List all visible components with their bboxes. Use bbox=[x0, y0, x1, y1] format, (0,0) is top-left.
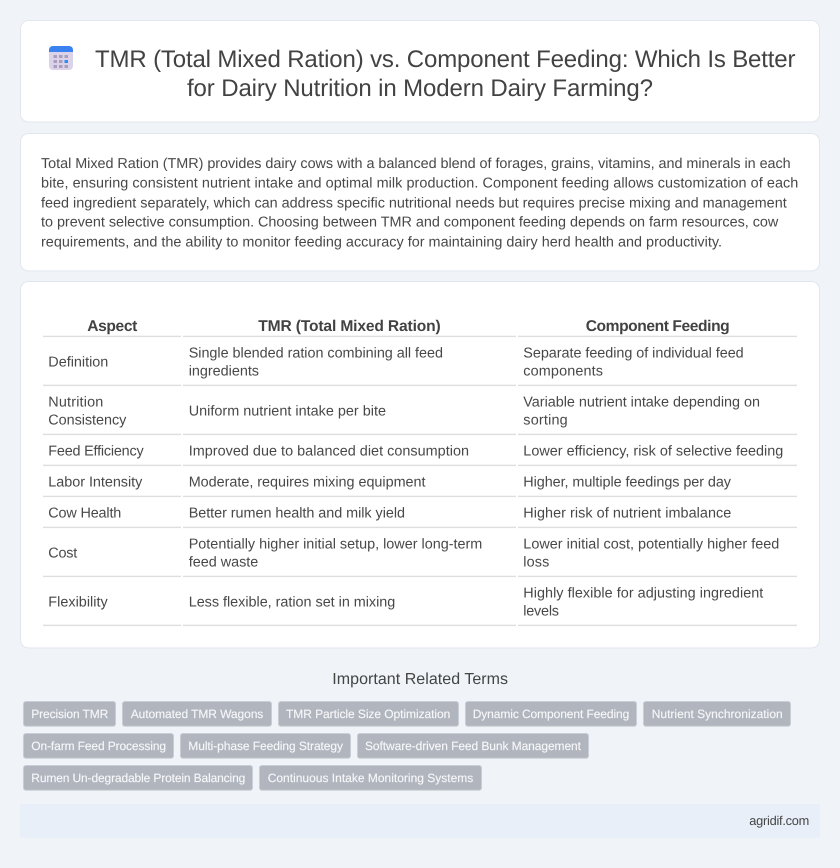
row: cost: Cost bbox=[48, 545, 77, 561]
row: definition: components bbox=[523, 364, 603, 380]
related term tags: TMR Particle Size Optimization bbox=[286, 707, 450, 721]
intro paragraph bbox=[41, 156, 798, 250]
title bbox=[95, 46, 796, 102]
intro paragraph: Total Mixed Ration (TMR) provides dairy cows with a balanced blend of forages, grains, vitamins, and minerals in each bbox=[41, 156, 791, 172]
row: cost: feed waste bbox=[189, 554, 258, 570]
row: feed efficiency bbox=[43, 443, 797, 466]
row: definition: Definition bbox=[48, 355, 108, 371]
title: for Dairy Nutrition in Modern Dairy Farming? bbox=[187, 75, 653, 102]
row: flexibility: Flexibility bbox=[48, 594, 108, 610]
footer bar bbox=[20, 804, 820, 838]
row: flexibility: Less flexible, ration set in mixing bbox=[189, 594, 395, 610]
row: cow health: Cow Health bbox=[48, 505, 121, 521]
row: flexibility: Highly flexible for adjusting ingredient bbox=[523, 585, 763, 601]
table header row: Aspect bbox=[87, 318, 137, 335]
panel: introduction bbox=[20, 134, 820, 271]
intro paragraph: feed ingredient separately, which can address specific nutritional needs but requires precise mixing and management bbox=[41, 196, 787, 212]
footer source: agridif.com bbox=[749, 813, 809, 828]
row: nutrition consistency: Variable nutrient intake depending on bbox=[523, 395, 760, 411]
related term tags: Software-driven Feed Bunk Management bbox=[365, 739, 582, 753]
related term tags bbox=[24, 702, 790, 790]
row: definition: ingredients bbox=[189, 364, 259, 380]
row: flexibility bbox=[43, 585, 797, 626]
row: labor intensity: Moderate, requires mixing equipment bbox=[189, 474, 426, 490]
related term tags: Dynamic Component Feeding bbox=[473, 707, 629, 721]
related term tags: Rumen Un-degradable Protein Balancing bbox=[31, 771, 245, 785]
row: feed efficiency: Feed Efficiency bbox=[48, 443, 144, 459]
row: nutrition consistency: Consistency bbox=[48, 413, 127, 429]
panel: title header bbox=[20, 20, 820, 122]
row: definition: Single blended ration combining all feed bbox=[189, 346, 443, 362]
related term tags: Continuous Intake Monitoring Systems bbox=[268, 771, 473, 785]
row: nutrition consistency: Nutrition bbox=[48, 395, 103, 411]
row: nutrition consistency: sorting bbox=[523, 413, 568, 429]
icon: calendar bbox=[49, 46, 73, 70]
related term tags: Automated TMR Wagons bbox=[131, 707, 263, 721]
intro paragraph: bite, ensuring consistent nutrient intake and optimal milk production. Component feeding allows customization of each bbox=[41, 176, 798, 192]
table header row: TMR (Total Mixed Ration) bbox=[258, 318, 441, 335]
heading: important related terms: Important Related Terms bbox=[332, 671, 508, 688]
row: definition: Separate feeding of individual feed bbox=[523, 346, 744, 362]
intro paragraph: to prevent selective consumption. Choosing between TMR and component feeding depends on farm resources, cow bbox=[41, 214, 779, 230]
related term tags: Precision TMR bbox=[31, 707, 109, 721]
row: feed efficiency: Improved due to balanced diet consumption bbox=[189, 443, 469, 459]
related term tags: On-farm Feed Processing bbox=[31, 739, 166, 753]
row: definition bbox=[43, 346, 797, 386]
row: labor intensity: Higher, multiple feedings per day bbox=[523, 474, 732, 490]
row: cow health bbox=[43, 505, 797, 528]
title: TMR (Total Mixed Ration) vs. Component Feeding: Which Is Better bbox=[95, 46, 796, 73]
row: labor intensity bbox=[43, 474, 797, 497]
row: cost: Lower initial cost, potentially higher feed bbox=[523, 536, 779, 552]
row: cost bbox=[43, 536, 797, 577]
table header row: Component Feeding bbox=[586, 318, 730, 335]
panel: comparison table bbox=[20, 282, 820, 648]
row: feed efficiency: Lower efficiency, risk of selective feeding bbox=[523, 443, 783, 459]
row: labor intensity: Labor Intensity bbox=[48, 474, 143, 490]
row: cow health: Higher risk of nutrient imbalance bbox=[523, 505, 731, 521]
row: cost: Potentially higher initial setup, lower long-term bbox=[189, 536, 482, 552]
row: cow health: Better rumen health and milk yield bbox=[189, 505, 405, 521]
related term tags: Nutrient Synchronization bbox=[652, 707, 783, 721]
intro paragraph: requirements, and the ability to monitor feeding accuracy for maintaining dairy herd health and productivity. bbox=[41, 234, 722, 250]
row: nutrition consistency: Uniform nutrient intake per bite bbox=[189, 403, 386, 419]
related term tags: Multi-phase Feeding Strategy bbox=[188, 739, 343, 753]
table header row bbox=[43, 318, 797, 337]
row: cost: loss bbox=[523, 554, 549, 570]
row: flexibility: levels bbox=[523, 603, 559, 619]
row: nutrition consistency bbox=[43, 395, 797, 435]
